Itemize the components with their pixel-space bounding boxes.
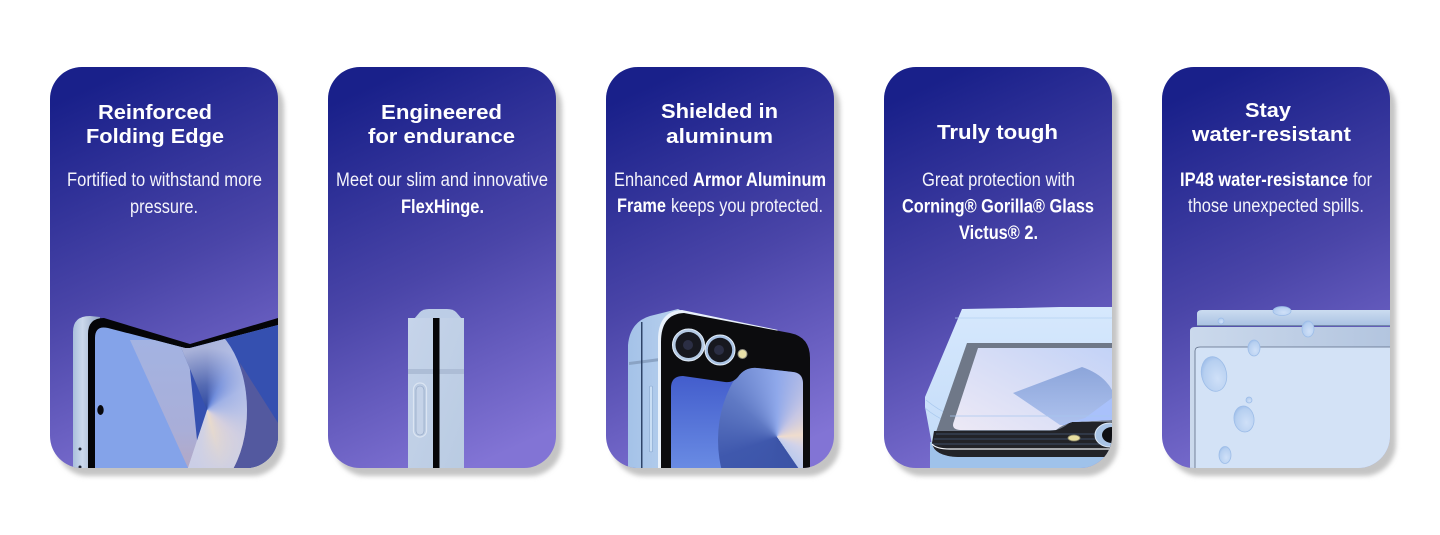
- body text: FlexHinge.: [401, 197, 484, 218]
- body text: Armor Aluminum: [693, 170, 826, 191]
- heading: [1191, 100, 1351, 146]
- heading: [661, 101, 778, 148]
- body text: [1180, 170, 1373, 217]
- body text: [67, 170, 262, 218]
- illustration: folded phone with cameras: [628, 309, 810, 468]
- body text: [336, 170, 548, 218]
- heading: Stay: [1245, 100, 1292, 122]
- body text: Corning® Gorilla® Glass: [902, 196, 1094, 218]
- body text: keeps you protected.: [671, 196, 823, 217]
- body text: Fortified to withstand more: [67, 170, 262, 191]
- body text: for: [1353, 170, 1373, 191]
- body text: Victus® 2.: [959, 223, 1038, 244]
- water drops: [1198, 306, 1314, 464]
- panel: truly tough: [884, 67, 1125, 476]
- heading: Folding Edge: [86, 126, 224, 148]
- body text: [614, 170, 826, 217]
- panel: stay water-resistant: [1162, 67, 1396, 476]
- body text: Great protection with: [922, 170, 1075, 191]
- heading: Shielded in: [661, 101, 778, 123]
- heading: Engineered: [381, 102, 502, 124]
- body text: Frame: [617, 196, 666, 217]
- panel: reinforced folding edge: [50, 67, 286, 478]
- heading: [86, 102, 224, 148]
- panel: shielded in aluminum: [606, 67, 842, 478]
- illustration: glass layers on phone: [925, 307, 1125, 470]
- heading: Truly tough: [937, 122, 1058, 144]
- camera ring and flash: [1068, 422, 1112, 448]
- body text: those unexpected spills.: [1188, 196, 1364, 217]
- panel: engineered for endurance: [328, 67, 562, 476]
- body text: pressure.: [130, 197, 198, 218]
- illustration: phone with water drops: [1190, 306, 1392, 470]
- illustration: unfolded phone: [73, 316, 278, 468]
- body text: Enhanced: [614, 170, 688, 191]
- heading: for endurance: [368, 126, 515, 148]
- heading: water-resistant: [1191, 124, 1351, 146]
- body text: Meet our slim and innovative: [336, 170, 548, 191]
- body text: [902, 170, 1094, 244]
- body text: IP48 water-resistance: [1180, 170, 1348, 191]
- camera lenses: [672, 329, 747, 365]
- heading: [368, 102, 515, 148]
- heading: Reinforced: [98, 102, 212, 124]
- heading: aluminum: [666, 126, 773, 148]
- illustration: hinge side view: [408, 309, 464, 468]
